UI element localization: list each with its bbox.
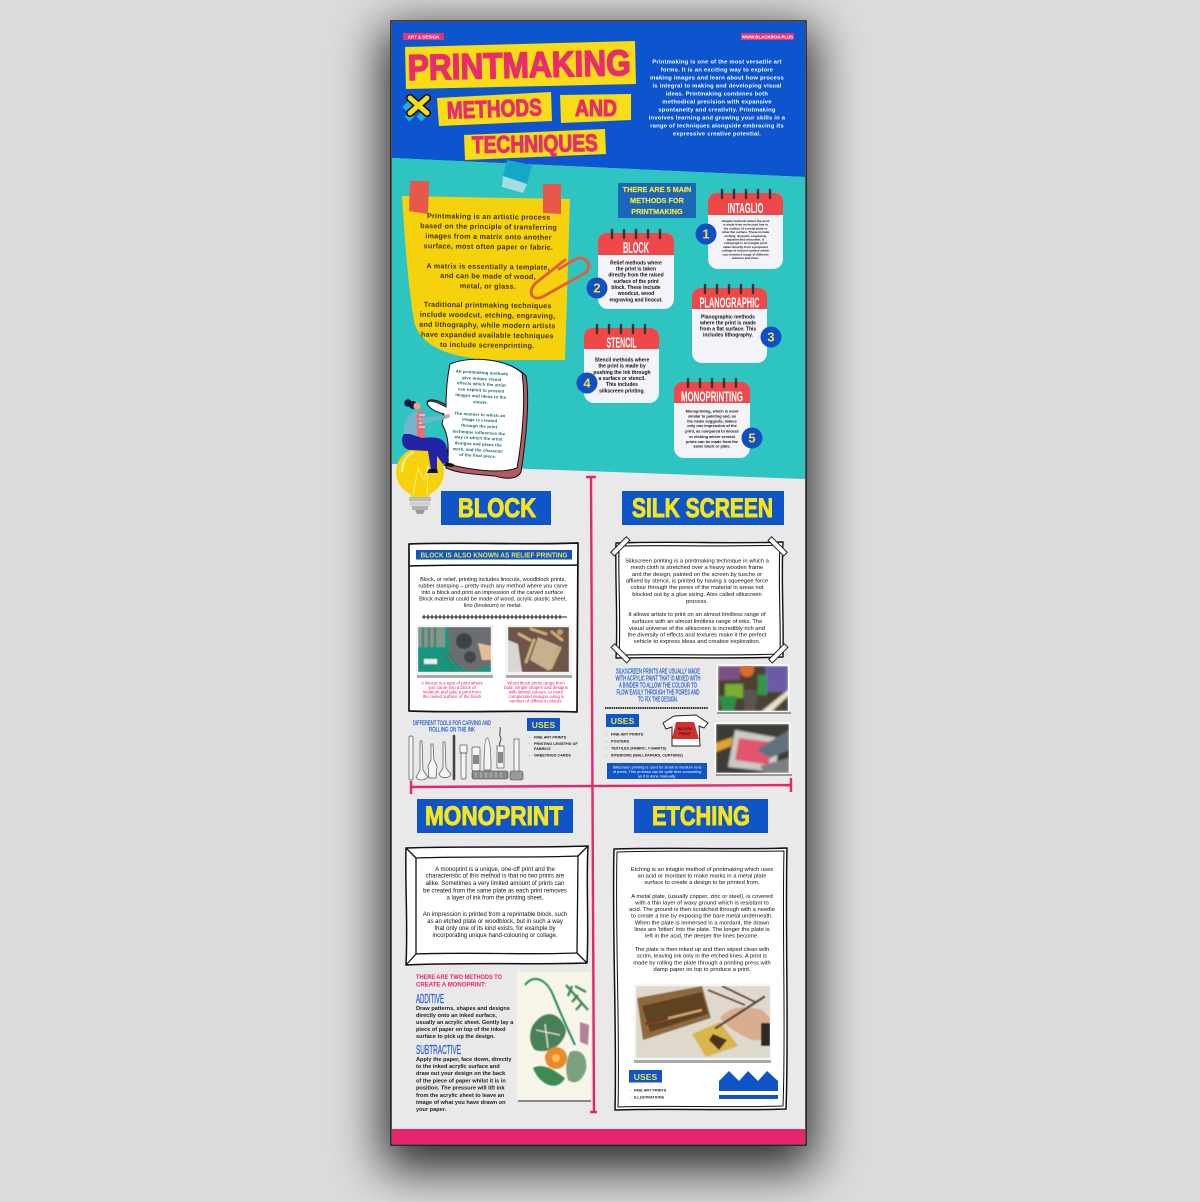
etching paragraph: A metal plate, (usually copper, zinc or steel), is covered bbox=[631, 894, 773, 900]
calendar card: intaglio: the surface of a metal plate or bbox=[724, 226, 768, 230]
etching paragraph: damp paper on top to produce a print. bbox=[653, 967, 751, 973]
silk screen blue note: A BINDER TO ALLOW THE COLOUR TO bbox=[619, 680, 697, 690]
monoprint paragraph: A monoprint is a unique, one-off print and the bbox=[435, 867, 555, 873]
etching uses bbox=[629, 1070, 667, 1100]
illustration: carving tools bbox=[409, 727, 523, 780]
bubble text: through the print bbox=[461, 423, 498, 429]
section heading: etching: ETCHING bbox=[652, 801, 750, 831]
calendar card: planographic bbox=[692, 285, 767, 363]
calendar card: intaglio: INTAGLIO bbox=[728, 200, 764, 217]
intro paragraph: range of techniques alongside embracing its bbox=[650, 124, 784, 130]
number badge 1 bbox=[696, 224, 716, 244]
silk screen paragraph bbox=[625, 558, 770, 645]
heading box: 5 main methods: PRINTMAKING bbox=[631, 207, 683, 216]
calendar card: intaglio: collage of incised surface which bbox=[722, 249, 769, 253]
calendar card: block: BLOCK bbox=[623, 240, 649, 257]
number badge 2: 2 bbox=[593, 280, 601, 296]
calendar card: stencil: pushing the ink through bbox=[593, 370, 651, 376]
yellow note bbox=[402, 181, 570, 360]
uses list: · bbox=[529, 742, 530, 746]
calendar card: intaglio: Intaglio methods where the print bbox=[722, 219, 769, 223]
etching paragraph: The plate is then inked up and then wiped clean with bbox=[635, 947, 769, 953]
caption: linocut: you carve into a block of bbox=[428, 685, 476, 690]
number badge 3: 3 bbox=[767, 330, 775, 344]
intro paragraph: ideas. Printmaking combines both bbox=[666, 92, 768, 98]
poster background bbox=[391, 21, 806, 1145]
etching paragraph: surface to create a design to be printed from. bbox=[644, 880, 760, 886]
tag: website bbox=[741, 33, 794, 40]
note text: surface, most often paper or fabric. bbox=[424, 241, 553, 252]
etching paragraph: left in the acid, the deeper the lines become. bbox=[645, 934, 759, 940]
additive text: directly onto an inked surface, bbox=[416, 1013, 497, 1019]
intro paragraph: methodical precision with expansive bbox=[662, 100, 772, 106]
panel: etching bbox=[614, 848, 787, 1110]
heading box: 5 main methods bbox=[618, 183, 696, 218]
etching paragraph: an acid or mordant to make marks in a metal plate bbox=[638, 874, 766, 880]
calendar card: intaglio: is made from an incised line in bbox=[723, 223, 768, 227]
section heading: block: BLOCK bbox=[458, 493, 536, 523]
calendar card: stencil: Stencil methods where bbox=[595, 358, 649, 364]
monoprint paragraph: that only one of its kind exists, for example by bbox=[434, 926, 556, 932]
uses list: · bbox=[606, 740, 607, 744]
caption: wood block: with limited colours, to more bbox=[509, 690, 564, 694]
calendar card: intaglio: aquatint and mezzotint. A bbox=[727, 238, 765, 242]
photo: screen printing workshop bbox=[716, 663, 791, 714]
block subtitle bar: BLOCK IS ALSO KNOWN AS RELIEF PRINTING bbox=[420, 551, 568, 560]
intro paragraph: spontaneity and creativity. Printmaking bbox=[658, 108, 776, 114]
caption: wood block: bold, simple shapes and designs bbox=[504, 685, 569, 690]
bubble text: of the final piece. bbox=[459, 452, 496, 459]
block paragraph: into a block and print an impression of the carved surface. bbox=[421, 590, 565, 596]
calendar card: monoprinting: only one impression of the bbox=[687, 423, 738, 428]
section heading: silk screen: SILK SCREEN bbox=[632, 493, 773, 523]
silk screen blue note: TO FIX THE DESIGN. bbox=[638, 694, 678, 704]
title word: methods: METHODS bbox=[446, 94, 542, 125]
tag: website: WWW.BLACKBOX.PLUS bbox=[742, 34, 793, 40]
monoprint paragraph: incorporating unique hand-colouring or collage. bbox=[432, 933, 558, 939]
uses list: · bbox=[606, 732, 607, 736]
block paragraph: Block material could be made of wood, acrylic plastic sheet, bbox=[419, 596, 567, 602]
calendar card: block: directly from the raised bbox=[608, 273, 664, 279]
number badge 4: 4 bbox=[583, 376, 591, 390]
silk screen info box: as it is done manually. bbox=[638, 774, 676, 778]
bubble text: work, and the character bbox=[452, 446, 504, 454]
silk screen paragraph: the diversity of effects and textures make it the perfect bbox=[628, 632, 767, 638]
caption: wood block: Wood block prints range from bbox=[507, 680, 565, 686]
section heading: monoprint: MONOPRINT bbox=[425, 801, 563, 831]
subtractive text: your paper. bbox=[416, 1107, 447, 1113]
etching paragraph: to create a line by exposing the bare metal underneath. bbox=[631, 914, 773, 920]
photo: botanical monoprint bbox=[517, 972, 591, 1102]
uses list: INTERIORS (WALLPAPERS, CURTAINS) bbox=[611, 754, 684, 758]
number badge 2 bbox=[586, 278, 608, 298]
block paragraph: Block, or relief, printing includes linocuts, woodblock prints, bbox=[420, 577, 566, 583]
tools heading: ROLLING ON THE INK bbox=[429, 726, 475, 734]
bubble text: way in which the artist bbox=[453, 434, 503, 442]
silk screen paragraph: affixed by stencil, is printed by having a squeegee force bbox=[626, 578, 768, 584]
bubble text bbox=[451, 369, 509, 459]
divider: horizontal pink line bbox=[411, 778, 792, 794]
heading box: 5 main methods: THERE ARE 5 MAIN bbox=[623, 185, 691, 194]
uses list: · bbox=[529, 754, 530, 758]
monoprint paragraph: as an etched plate or woodblock, but in such a way bbox=[427, 919, 563, 925]
subtractive text: from the acrylic sheet to leave an bbox=[416, 1093, 505, 1099]
note text: and can be made of wood, bbox=[440, 271, 536, 281]
block uses bbox=[527, 718, 578, 758]
icon: printed t-shirt bbox=[663, 715, 708, 746]
additive text: surface to pick up the design. bbox=[416, 1034, 495, 1040]
number badge 5 bbox=[742, 428, 762, 448]
calendar card: monoprinting: or etching where several bbox=[689, 434, 735, 439]
icon: printed t-shirt: PRINT bbox=[679, 731, 692, 736]
caption: linocut: the raised surface of the block bbox=[423, 694, 482, 699]
block paragraph: lino (linoleum) or metal. bbox=[464, 603, 523, 609]
calendar card: intaglio: collagraph is an intaglio print bbox=[724, 241, 767, 245]
bubble text: give unique visual bbox=[462, 375, 501, 382]
intro paragraph: expressive creative potential. bbox=[673, 132, 761, 138]
calendar card: monoprinting: prints can be made from the bbox=[686, 439, 739, 444]
number badge 5: 5 bbox=[748, 430, 756, 446]
calendar card: stencil: This includes bbox=[606, 382, 638, 388]
caption: linocut: linoleum and take a print from bbox=[423, 690, 481, 694]
monoprint paragraph: a layer of ink from the printing sheet. bbox=[446, 896, 544, 902]
corner tapes bbox=[611, 537, 788, 663]
calendar card: block: Relief methods where bbox=[610, 260, 662, 266]
calendar card: block: the print is taken bbox=[616, 266, 656, 272]
block paragraph: rubber stamping – pretty much any method where you carve bbox=[418, 584, 568, 590]
note tape right bbox=[543, 184, 561, 214]
intro paragraph: involves learning and growing your skills in a bbox=[649, 116, 786, 122]
calendar card: block: surface of the print bbox=[613, 279, 659, 285]
note text: images from a matrix onto another bbox=[425, 231, 552, 242]
calendar card: block: block. These include bbox=[611, 285, 661, 291]
uses list: GREETINGS CARDS bbox=[534, 754, 571, 758]
hatched rule bbox=[605, 707, 708, 709]
uses list: · bbox=[630, 1088, 631, 1092]
number badge 3 bbox=[760, 326, 782, 348]
additive text: usually an acrylic sheet. Gently lay a bbox=[416, 1020, 514, 1026]
calendar card: monoprinting: same block or plate. bbox=[693, 444, 731, 449]
methods heading bbox=[416, 974, 502, 988]
icon: cross sparkle bbox=[402, 98, 427, 121]
uses list: FINE ART PRINTS bbox=[534, 736, 567, 740]
monoprint paragraph: be created from the same plate as each print removes bbox=[423, 888, 567, 894]
subtractive text: of the piece of paper whilst it is in bbox=[416, 1078, 506, 1084]
silk screen paragraph: It allows artists to print on an almost limitless range of bbox=[628, 612, 766, 618]
icon: paperclip bbox=[531, 258, 589, 298]
bubble text: All printmaking methods bbox=[456, 369, 509, 376]
etching paragraph: made by rolling the plate through a printing press with bbox=[633, 960, 771, 966]
uses list: FINE ART PRINTS bbox=[634, 1088, 667, 1092]
calendar card: intaglio: other flat surface. These include bbox=[722, 230, 770, 234]
intro paragraph: Printmaking is one of the most versatile art bbox=[652, 60, 782, 66]
calendar card: planographic: where the print is made bbox=[699, 321, 756, 327]
bubble text: The manner in which an bbox=[454, 411, 506, 418]
note text: Printmaking is an artistic process bbox=[427, 211, 551, 222]
note text: Traditional printmaking techniques bbox=[424, 300, 552, 310]
subtractive text: image of what you have drawn on bbox=[416, 1100, 506, 1106]
etching paragraph: scrim, leaving ink only in the etched lines. A print is bbox=[637, 954, 767, 960]
etching paragraph bbox=[629, 867, 775, 973]
calendar card: monoprinting bbox=[674, 379, 750, 458]
silk screen paragraph: and the design, painted on the screen by tusche or bbox=[632, 572, 762, 578]
calendar card: intaglio: taken directly from a prepared bbox=[723, 245, 768, 249]
calendar card: intaglio: can contain a range of different bbox=[722, 252, 769, 256]
intro paragraph: forms. It is an exciting way to explore bbox=[661, 68, 774, 74]
uses list: POSTERS bbox=[611, 740, 630, 744]
etching paragraph: with a thin layer of waxy ground which is resistant to bbox=[634, 900, 769, 906]
photo: linocut bbox=[416, 625, 493, 678]
caption: wood block: number of different colours. bbox=[509, 698, 563, 704]
intro paragraph: making images and learn about how process bbox=[650, 76, 784, 82]
icon: lightbulb bbox=[396, 448, 444, 514]
uses list: ILLUSTRATIONS bbox=[634, 1096, 665, 1100]
silk screen paragraph: mesh cloth is stretched over a heavy wooden frame bbox=[631, 565, 763, 571]
uses list: TEXTILES (FABRIC, T-SHIRTS) bbox=[611, 746, 667, 750]
subtractive text bbox=[416, 1057, 512, 1113]
bubble text: effects which the artist bbox=[457, 380, 507, 388]
monoprint paragraph: alike. Sometimes a very limited amount of prints can bbox=[426, 881, 564, 887]
icon: blue zigzag crown bbox=[719, 1071, 778, 1099]
tools heading bbox=[413, 720, 491, 734]
uses list: FABRICS bbox=[534, 747, 551, 751]
intro paragraph: is integral to making and developing visual bbox=[652, 84, 782, 90]
panel: monoprint bbox=[406, 846, 588, 965]
calendar card: block: woodcut, wood bbox=[617, 291, 654, 297]
tag: art and design: ART & DESIGN bbox=[408, 34, 439, 40]
bubble text: viewer. bbox=[473, 399, 488, 405]
tools heading: DIFFERENT TOOLS FOR CARVING AND bbox=[413, 720, 491, 727]
silk screen blue note: WITH ACRYLIC PAINT THAT IS MIXED WITH bbox=[616, 674, 700, 682]
additive text bbox=[416, 1006, 514, 1040]
title word: techniques: TECHNIQUES bbox=[472, 130, 598, 159]
bubble text: can exploit to present bbox=[458, 386, 505, 394]
note tape left bbox=[409, 181, 429, 214]
speech bubble bbox=[427, 359, 528, 478]
silk screen paragraph: surfaces with an almost limitless range of inks. The bbox=[632, 619, 762, 625]
subtractive text: position. The pressure will lift ink bbox=[416, 1086, 505, 1092]
silk screen uses bbox=[606, 714, 684, 758]
intro paragraph bbox=[649, 60, 786, 138]
subtractive text: draw out your design on the back bbox=[416, 1071, 506, 1077]
bubble text: images and ideas to the bbox=[455, 392, 507, 400]
silk screen paragraph: process. bbox=[686, 599, 708, 605]
uses list: FINE ART PRINTS bbox=[611, 732, 644, 736]
etching paragraph: When the plate is immersed in a mordant, the drawn bbox=[635, 920, 769, 926]
uses list bbox=[630, 1088, 667, 1100]
calendar card: monoprinting: MONOPRINTING bbox=[681, 388, 743, 406]
uses list: · bbox=[630, 1096, 631, 1100]
photo: etching plate bbox=[634, 984, 771, 1063]
number badge 4 bbox=[576, 372, 598, 394]
monoprint paragraph bbox=[423, 867, 567, 939]
calendar card: planographic: includes lithography. bbox=[703, 333, 754, 339]
silk screen paragraph: colour through the pores of the material in areas not bbox=[630, 585, 764, 591]
calendar card: intaglio: textures and lines. bbox=[732, 256, 759, 260]
title bbox=[405, 41, 636, 160]
note text: and lithography, while modern artists bbox=[419, 320, 556, 330]
note text bbox=[419, 211, 557, 350]
silk screen blue note: SILKSCREEN PRINTS ARE USUALLY MADE bbox=[616, 666, 700, 676]
bubble text: image is created bbox=[462, 417, 498, 423]
note text: based on the principle of transferring bbox=[420, 221, 557, 232]
etching paragraph: Etching is an intaglio method of printmaking which uses bbox=[631, 867, 773, 873]
monoprint paragraph: characteristic of this method is that no two prints are bbox=[426, 874, 565, 880]
photo: screen printing press bbox=[714, 722, 792, 776]
calendar card: block bbox=[598, 230, 674, 309]
uses badge: USES bbox=[611, 716, 634, 726]
silk screen info box: of prints. This process can be quite time consuming bbox=[613, 769, 701, 774]
methods heading: THERE ARE TWO METHODS TO bbox=[416, 974, 502, 981]
calendar card: planographic: from a flat surface. This bbox=[700, 327, 756, 333]
monoprint methods text: ADDITIVE bbox=[416, 991, 444, 1006]
methods heading: CREATE A MONOPRINT: bbox=[416, 982, 486, 988]
silk screen paragraph: blocked out by a glue sizing. Also called silkscreen bbox=[632, 592, 762, 598]
caption: wood block: complicated designs using a bbox=[508, 694, 564, 699]
calendar card: monoprinting: the name suggests, makes bbox=[687, 418, 737, 423]
caption: linocut bbox=[421, 680, 484, 699]
uses badge: USES bbox=[634, 1072, 657, 1082]
calendar card: stencil: a surface or stencil. bbox=[599, 376, 646, 382]
calendar card: monoprinting: Monoprinting, which is most bbox=[686, 408, 739, 414]
calendar card: stencil: STENCIL bbox=[606, 334, 636, 352]
calendar card: planographic: Planographic methods bbox=[701, 314, 755, 320]
silk screen blue note bbox=[616, 666, 700, 704]
calendar card: stencil: silkscreen printing. bbox=[599, 388, 646, 394]
note text: A matrix is essentially a template, bbox=[426, 261, 550, 272]
title word: and bbox=[560, 94, 631, 123]
note text: include woodcut, etching, engraving, bbox=[420, 310, 555, 320]
silk screen info box bbox=[607, 763, 707, 779]
note text: to include screenprinting. bbox=[440, 340, 534, 350]
title word: and: AND bbox=[575, 95, 617, 121]
monoprint paragraph: An impression is printed from a reprintable block, such bbox=[423, 912, 567, 918]
uses badge: USES bbox=[532, 720, 555, 730]
calendar card: stencil bbox=[584, 325, 659, 403]
etching paragraph: acid. The ground is then scratched through with a needle bbox=[629, 907, 775, 913]
note text: metal, or glass. bbox=[460, 281, 516, 291]
calendar card: stencil: the print is made by bbox=[598, 364, 646, 370]
title word: printmaking: PRINTMAKING bbox=[407, 42, 631, 88]
uses list bbox=[606, 732, 684, 758]
additive text: piece of paper on top of the inked bbox=[416, 1027, 506, 1033]
icon: printed t-shirt: BLOCK bbox=[678, 726, 692, 731]
panel: block bbox=[409, 543, 578, 712]
bubble text: designs and plans the bbox=[455, 440, 503, 448]
silk screen paragraph: visual universe of the silkscreen is incredibly rich and bbox=[629, 626, 765, 632]
poster shadow bbox=[391, 21, 806, 1145]
etching paragraph: lines are 'bitten' into the plate. The longer the plate is bbox=[634, 927, 770, 933]
monoprint methods text: SUBTRACTIVE bbox=[416, 1042, 461, 1057]
calendar card: monoprinting: similar to painting and, as bbox=[688, 414, 736, 418]
calendar card: intaglio: etching, drypoint, engraving, bbox=[724, 234, 767, 238]
caption: linocut: A linocut is a type of print where bbox=[421, 680, 484, 686]
additive text: Draw patterns, shapes and designs bbox=[416, 1006, 510, 1012]
uses list: · bbox=[529, 736, 530, 740]
divider: vertical pink line bbox=[586, 477, 597, 1112]
illustration: woman sitting on bulb bbox=[402, 399, 454, 473]
panel: silk screen bbox=[611, 537, 788, 663]
calendar card: block: engraving and linocut. bbox=[609, 297, 663, 303]
calendar card: intaglio bbox=[708, 190, 783, 269]
subtractive text: Apply the paper, face down, directly bbox=[416, 1057, 512, 1063]
tag: art and design bbox=[403, 33, 444, 40]
calendar card: planographic: PLANOGRAPHIC bbox=[700, 294, 760, 312]
silk screen paragraph: vehicle to express ideas and creative exploration. bbox=[634, 639, 761, 645]
blue tape bbox=[502, 160, 532, 193]
calendar card: monoprinting: print, as compared to linocut bbox=[685, 428, 739, 434]
uses list bbox=[529, 736, 578, 758]
block paragraph bbox=[418, 577, 568, 609]
silk screen blue note: FLOW EASILY THROUGH THE PORES AND bbox=[616, 688, 700, 696]
subtractive text: to the inked acrylic surface and bbox=[416, 1064, 500, 1070]
photo: wood block tools bbox=[505, 625, 572, 678]
note text: have expanded available techniques bbox=[421, 330, 554, 340]
silk screen paragraph: Silkscreen printing is a printmaking technique in which a bbox=[625, 558, 770, 564]
bubble text: technique influences the bbox=[452, 429, 506, 436]
monoprint methods text bbox=[416, 974, 514, 1113]
caption: wood block bbox=[504, 680, 569, 704]
hatched rule bbox=[422, 616, 567, 618]
uses list: PRINTING LENGTHS OF bbox=[534, 742, 578, 746]
heading box: 5 main methods: METHODS FOR bbox=[630, 196, 685, 205]
uses list: · bbox=[606, 746, 607, 750]
uses list: · bbox=[606, 754, 607, 758]
number badge 1: 1 bbox=[702, 226, 710, 242]
silk screen info box: Silkscreen printing is used for small to medium runs bbox=[613, 764, 701, 769]
